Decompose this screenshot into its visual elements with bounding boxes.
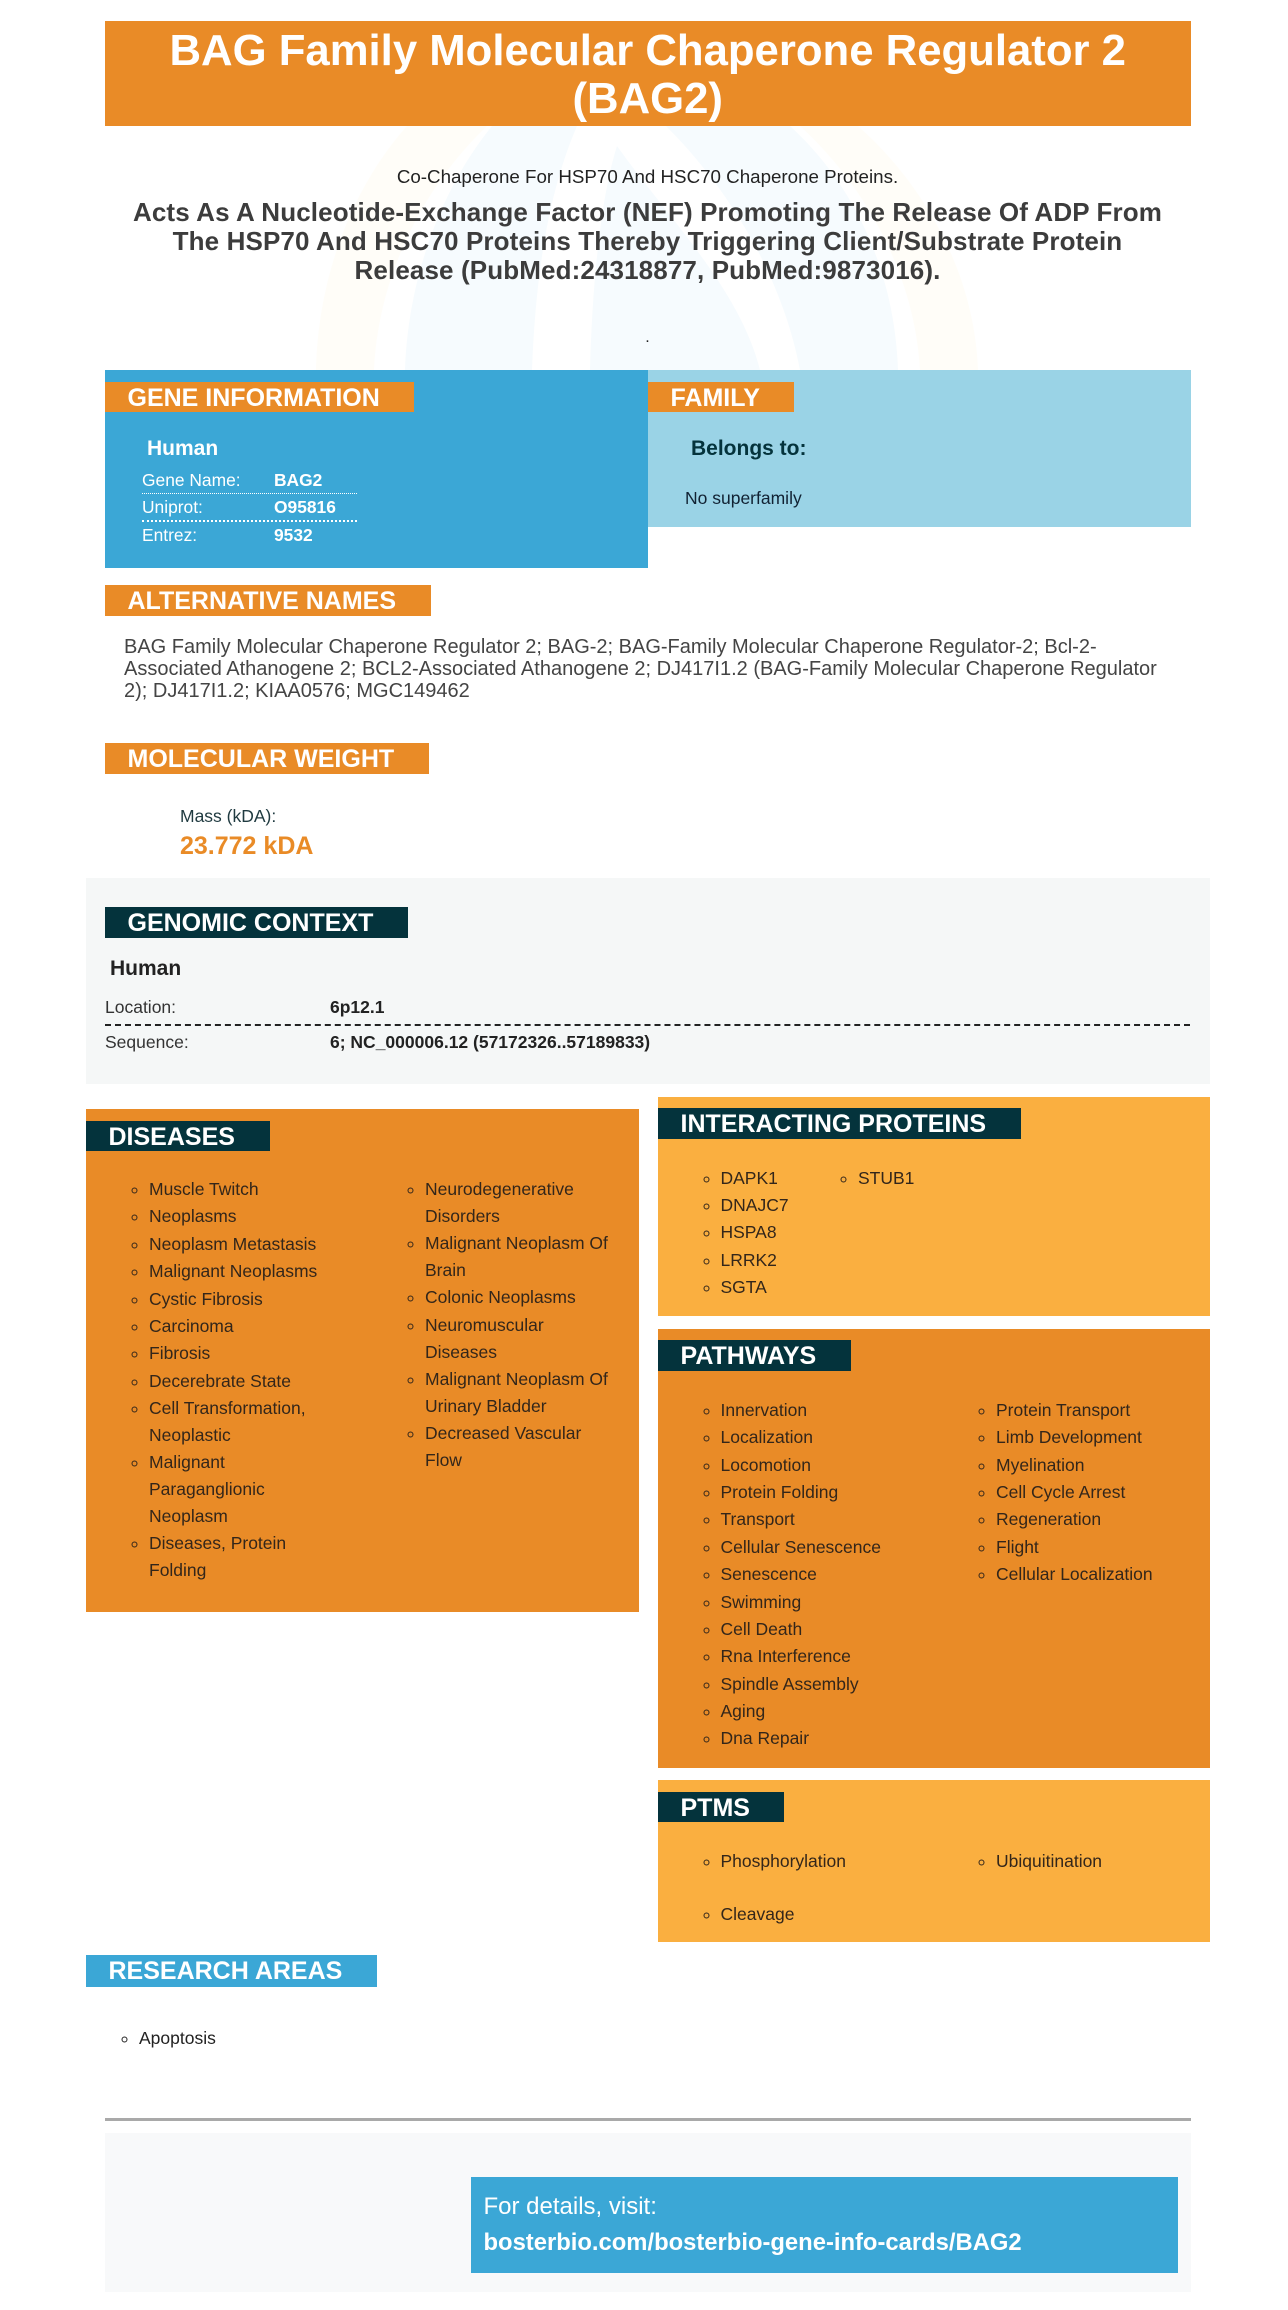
panel: family [648, 370, 1190, 527]
pathways column 1: Spindle Assembly [720, 1674, 859, 1694]
diseases list column 2: Decreased Vascular [425, 1423, 581, 1443]
superfamily value: No superfamily [685, 488, 802, 508]
ptms column 1: Cleavage [720, 1904, 794, 1924]
ptms column 1: Phosphorylation [720, 1851, 846, 1871]
species label: Human [110, 957, 181, 980]
panel: interacting proteins [658, 1097, 1210, 1316]
alternative names text [124, 636, 1157, 702]
ptms column 2: Ubiquitination [996, 1851, 1102, 1871]
pathways column 1: Cell Death [720, 1619, 802, 1639]
pathways column 2 [978, 1400, 1153, 1584]
interacting proteins column 1: DNAJC7 [720, 1195, 789, 1215]
diseases list column 2: Colonic Neoplasms [425, 1287, 576, 1307]
diseases list column 1: Folding [149, 1560, 206, 1580]
heading: ptms: PTMS [680, 1794, 750, 1822]
panel: genomic context [86, 878, 1210, 1084]
gene info table: Uniprot: [142, 497, 203, 517]
diseases list column 2: Brain [425, 1260, 466, 1280]
pathways column 2: Protein Transport [996, 1400, 1130, 1420]
subtitle: Co-Chaperone For HSP70 And HSC70 Chaperone Proteins. [397, 166, 898, 186]
diseases list column 1: Malignant [149, 1452, 225, 1472]
heading: ptms [658, 1792, 784, 1822]
heading: family: FAMILY [670, 384, 760, 412]
gene info table [142, 470, 357, 544]
interacting proteins column 1: SGTA [720, 1277, 767, 1297]
heading: family [648, 382, 794, 412]
diseases list column 1: Paraganglionic [149, 1479, 265, 1499]
diseases list column 1: Diseases, Protein [149, 1533, 286, 1553]
diseases list column 2: Urinary Bladder [425, 1396, 547, 1416]
interacting proteins column 2: STUB1 [858, 1168, 914, 1188]
heading: pathways [658, 1340, 851, 1371]
diseases list column 2: Malignant Neoplasm Of [425, 1233, 608, 1253]
alternative names text: 2); DJ417I1.2; KIAA0576; MGC149462 [124, 680, 470, 702]
belongs to label: Belongs to: [691, 437, 806, 460]
interacting proteins column 1: DAPK1 [720, 1168, 778, 1188]
diseases list column 1: Fibrosis [149, 1343, 210, 1363]
pathways column 1: Swimming [720, 1592, 801, 1612]
sequence row: 6; NC_000006.12 (57172326..57189833) [330, 1032, 650, 1052]
diseases list column 1: Cell Transformation, [149, 1398, 306, 1418]
mass value: 23.772 kDA [180, 832, 313, 860]
pathways column 2: Flight [996, 1537, 1039, 1557]
sequence row [105, 1032, 650, 1052]
pathways column 1: Innervation [720, 1400, 807, 1420]
title banner: (BAG2) [572, 74, 723, 123]
heading: pathways: PATHWAYS [680, 1342, 816, 1370]
diseases list column 1: Neoplastic [149, 1425, 231, 1445]
callout: details link: bosterbio.com/bosterbio-gene-info-cards/BAG2 [484, 2229, 1022, 2256]
heading: diseases: DISEASES [108, 1123, 235, 1151]
function description: The HSP70 And HSC70 Proteins Thereby Triggering Client/Substrate Protein [173, 226, 1122, 256]
pathways column 1: Senescence [720, 1564, 817, 1584]
location row: Location: [105, 997, 176, 1017]
research areas list: Apoptosis [139, 2028, 216, 2048]
diseases list column 2: Disorders [425, 1206, 500, 1226]
gene info table: O95816 [274, 497, 336, 517]
callout: details link: For details, visit: [484, 2193, 657, 2220]
ptms column 1 [704, 1851, 846, 1924]
interacting proteins column 1: LRRK2 [720, 1250, 777, 1270]
pathways column 2: Regeneration [996, 1509, 1101, 1529]
pathways column 1: Protein Folding [720, 1482, 838, 1502]
pathways column 2: Myelination [996, 1455, 1085, 1475]
interacting proteins column 1: HSPA8 [720, 1222, 777, 1242]
pathways column 1 [704, 1400, 881, 1748]
pathways column 2: Cell Cycle Arrest [996, 1482, 1125, 1502]
panel: gene information [105, 370, 648, 568]
species label: Human [147, 437, 218, 460]
heading: molecular weight: MOLECULAR WEIGHT [128, 745, 394, 773]
alternative names text: Associated Athanogene 2; BCL2-Associated Athanogene 2; DJ417I1.2 (BAG-Family Molecular Chaperone Regulator [124, 658, 1157, 680]
gene info table: BAG2 [274, 470, 322, 490]
pathways column 1: Locomotion [720, 1455, 811, 1475]
heading: research areas: RESEARCH AREAS [108, 1957, 342, 1985]
location row: 6p12.1 [330, 997, 384, 1017]
diseases list column 1: Carcinoma [149, 1316, 234, 1336]
diseases list column 2: Neuromuscular [425, 1315, 544, 1335]
function description [133, 197, 1162, 285]
diseases list column 2: Diseases [425, 1342, 497, 1362]
diseases list column 1: Malignant Neoplasms [149, 1261, 317, 1281]
location row [105, 997, 384, 1017]
panel: pathways [658, 1329, 1210, 1768]
callout: details link [471, 2177, 1178, 2273]
background watermark [405, 126, 898, 370]
alternative names text: BAG Family Molecular Chaperone Regulator 2; BAG-2; BAG-Family Molecular Chaperone Regulator-2; Bcl-2- [124, 636, 1097, 658]
heading: alternative names: ALTERNATIVE NAMES [128, 587, 396, 615]
sequence row: Sequence: [105, 1032, 189, 1052]
function description: Acts As A Nucleotide-Exchange Factor (NEF) Promoting The Release Of ADP From [133, 197, 1162, 227]
dot note: . [645, 329, 650, 346]
gene info table: 9532 [274, 524, 313, 544]
pathways column 1: Cellular Senescence [720, 1537, 881, 1557]
diseases list column 1: Neoplasm Metastasis [149, 1234, 316, 1254]
pathways column 1: Localization [720, 1427, 813, 1447]
pathways column 2: Limb Development [996, 1427, 1142, 1447]
diseases list column 1: Cystic Fibrosis [149, 1289, 263, 1309]
gene info table: Gene Name: [142, 470, 241, 490]
diseases list column 1: Decerebrate State [149, 1371, 291, 1391]
diseases list column 1: Muscle Twitch [149, 1179, 259, 1199]
diseases list column 1 [132, 1179, 317, 1580]
pathways column 1: Aging [720, 1701, 765, 1721]
gene info table: Entrez: [142, 524, 197, 544]
panel: ptms [658, 1780, 1210, 1942]
pathways column 1: Transport [720, 1509, 795, 1529]
title banner [105, 21, 1190, 126]
heading: diseases [86, 1121, 270, 1151]
pathways column 2: Cellular Localization [996, 1564, 1153, 1584]
diseases list column 2: Neurodegenerative [425, 1179, 574, 1199]
interacting proteins column 1 [704, 1168, 789, 1297]
panel: footer [105, 2133, 1190, 2292]
heading: interacting proteins: INTERACTING PROTEINS [680, 1110, 986, 1138]
diseases list column 1: Neoplasm [149, 1506, 228, 1526]
pathways column 1: Rna Interference [720, 1646, 851, 1666]
diseases list column 1: Neoplasms [149, 1206, 237, 1226]
pathways column 1: Dna Repair [720, 1728, 809, 1748]
heading: genomic context: GENOMIC CONTEXT [128, 909, 373, 937]
diseases list column 2: Malignant Neoplasm Of [425, 1369, 608, 1389]
heading: gene information: GENE INFORMATION [128, 384, 380, 412]
mass label: Mass (kDA): [180, 806, 276, 826]
diseases list column 2 [408, 1179, 608, 1470]
panel: diseases [86, 1109, 638, 1612]
diseases list column 2: Flow [425, 1450, 462, 1470]
title banner: BAG Family Molecular Chaperone Regulator 2 [170, 26, 1126, 75]
function description: Release (PubMed:24318877, PubMed:9873016). [354, 255, 940, 285]
